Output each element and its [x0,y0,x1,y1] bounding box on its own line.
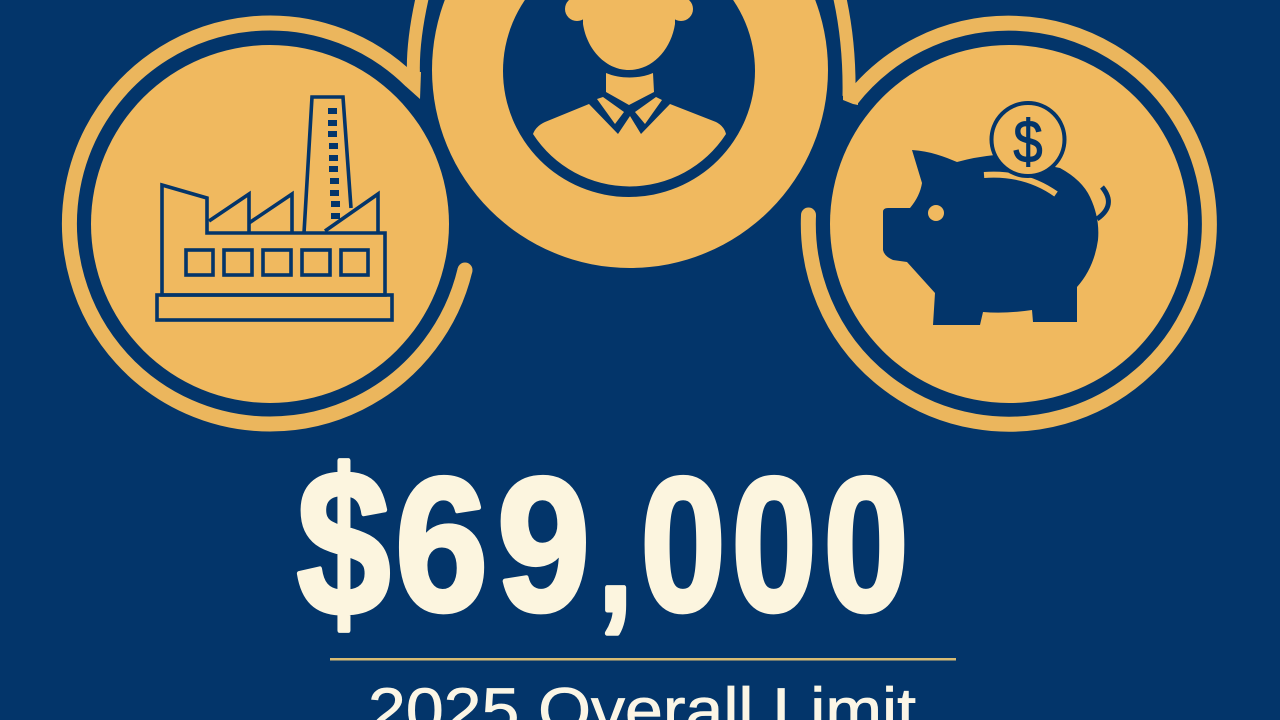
left junction wedge [406,72,421,99]
icon: piggy bank [883,103,1108,325]
right gold ring [808,23,1209,424]
icon: factory [157,97,392,320]
ring round cap [801,208,816,222]
icon group: piggy bank circle [801,23,1209,424]
dollar sign: $ [297,428,390,660]
left gold ring [69,23,465,424]
right disc [830,45,1188,403]
amount digits six nine: 69 [395,438,590,650]
center gold disc [432,0,828,268]
navy inner disc [503,0,755,197]
amount comma and zeros: 000 [641,438,909,651]
amount heading [297,428,909,660]
center right gold arc [838,0,849,96]
ring round cap [458,262,472,278]
icon: piggy bank: $ [1013,108,1043,175]
right junction wedge [843,90,858,105]
icon: person [533,0,726,186]
left disc [91,45,449,403]
divider line [330,658,956,660]
icon group: factory circle [69,23,472,424]
icon group: worker circle [406,0,858,268]
amount comma and zeros: , [599,475,632,642]
center left gold arc [413,0,424,76]
